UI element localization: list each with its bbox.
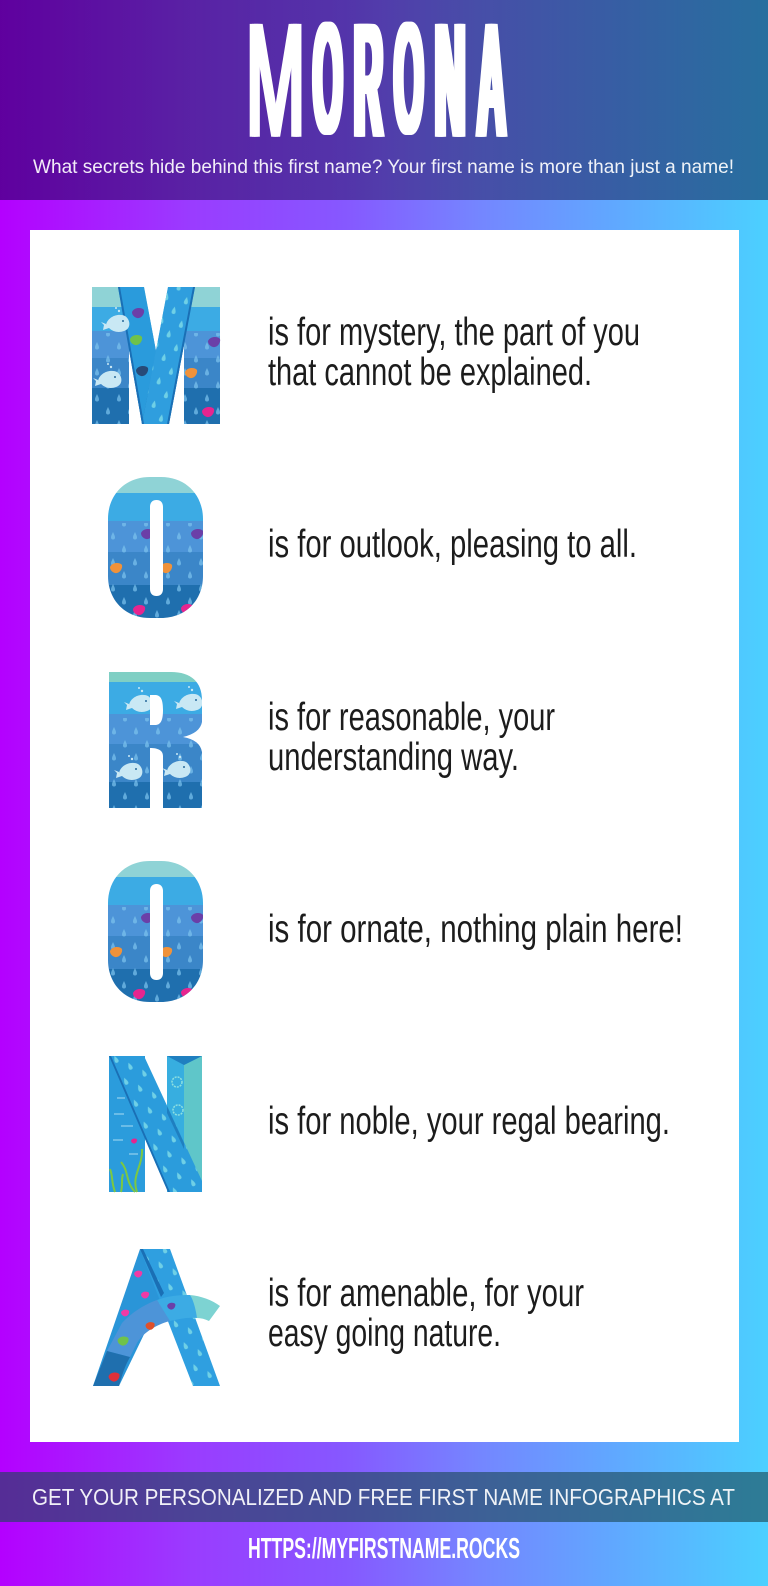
text: R line: is for reasonable, your: [268, 696, 555, 739]
text: A line: is for amenable, for your: [268, 1272, 584, 1315]
header band: [0, 0, 768, 200]
letter N illustration: [109, 1056, 202, 1192]
subtitle: What secrets hide behind this first name? Your first name is more than just a name!: [33, 156, 734, 178]
text: A line: easy going nature.: [268, 1312, 501, 1355]
letter O illustration: [108, 477, 203, 618]
text: M line: that cannot be explained.: [268, 351, 592, 394]
white card panel: [30, 230, 739, 1442]
footer URL: HTTPS://MYFIRSTNAME.ROCKS: [248, 1533, 520, 1565]
letter R illustration: [109, 672, 202, 808]
letter O illustration, second: [108, 861, 203, 1002]
footer band: [0, 1472, 768, 1522]
text: R line: understanding way.: [268, 736, 519, 779]
text: A line: [268, 1272, 584, 1355]
text: O line: is for outlook, pleasing to all.: [268, 523, 637, 566]
letter M illustration: [92, 287, 220, 424]
letter A illustration: [93, 1249, 220, 1386]
text: R line: [268, 696, 555, 779]
title: MORONA: [246, 0, 508, 173]
text: M line: is for mystery, the part of you: [268, 311, 640, 354]
text: M line: [268, 311, 640, 394]
